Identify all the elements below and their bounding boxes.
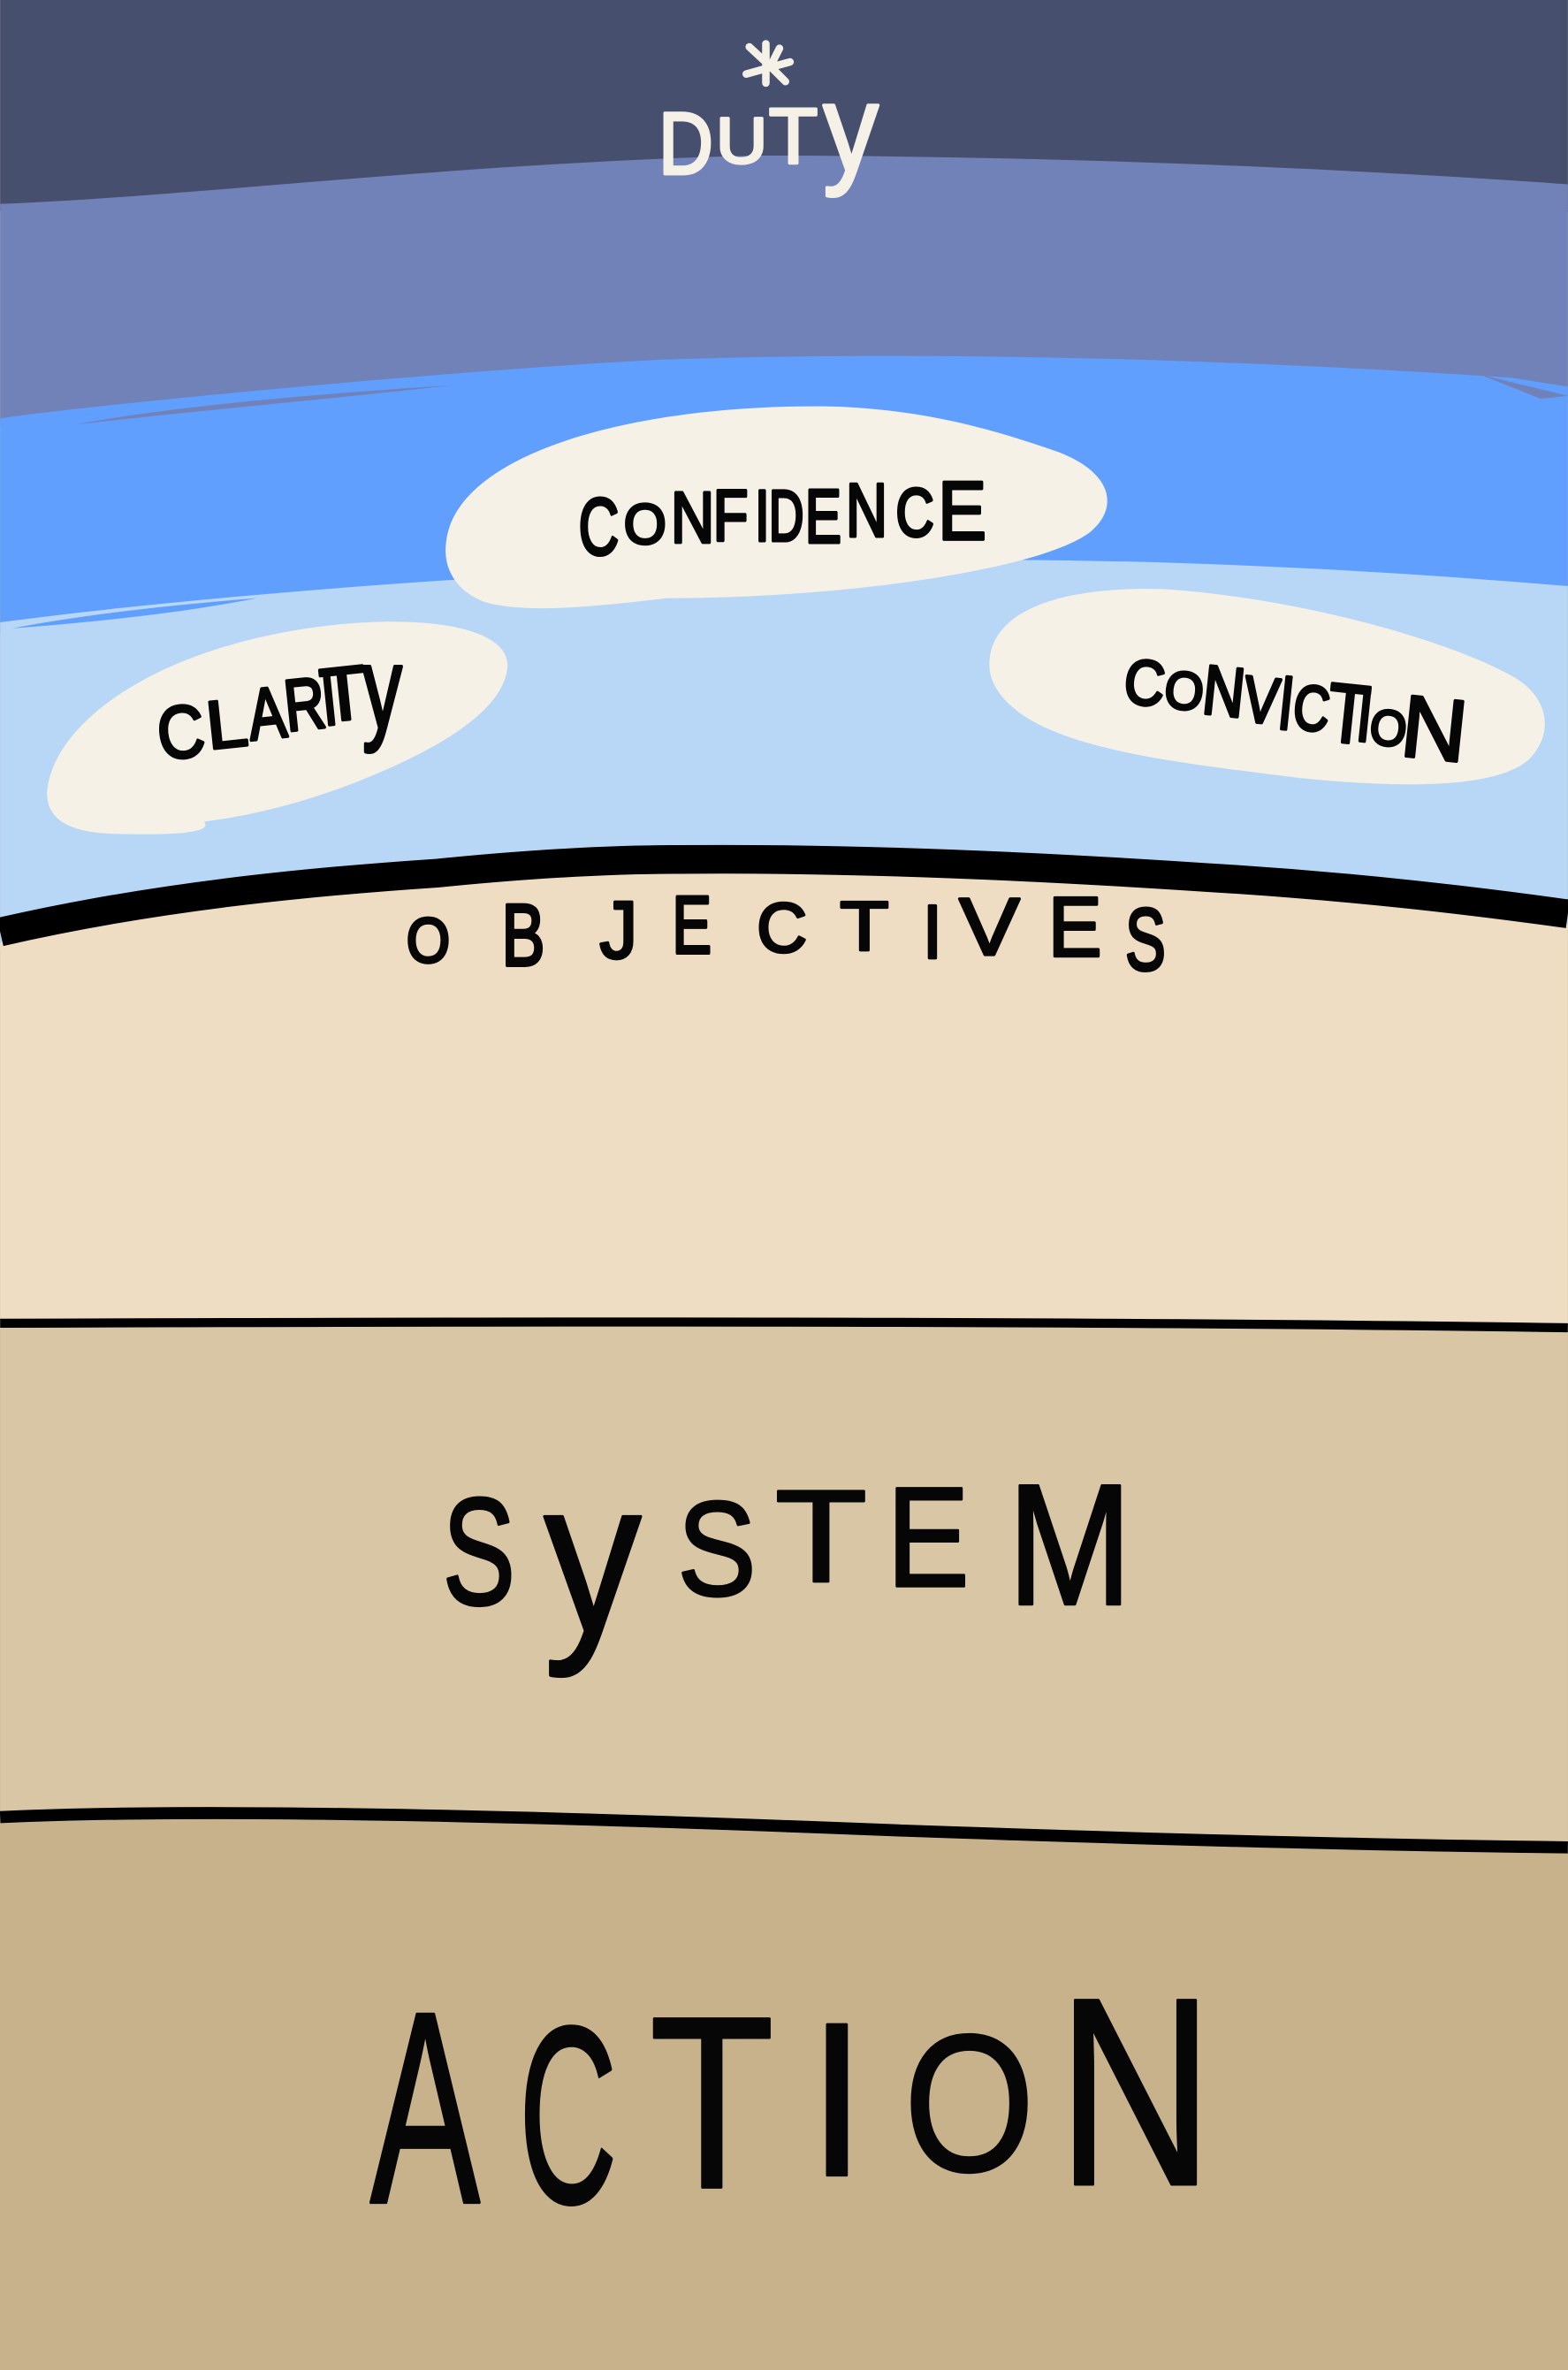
band: system ground [0,1322,1568,1850]
label: clarity: A [244,671,290,756]
label: confidence: I [755,476,770,557]
label: clarity: T [316,651,371,739]
label: conviction: I [1353,679,1376,757]
band: bright blue sky [0,356,1568,635]
label: confidence: E [805,475,841,559]
brush streaks: blue band edges [76,375,1568,424]
label: confidence: E [938,464,986,557]
label: objectives: B [501,887,544,984]
label: objectives: T [840,887,889,964]
band: action ground [0,1813,1568,2370]
label: objectives [407,880,1166,989]
label: objectives: E [1048,880,1101,974]
label: duty: T [769,93,818,180]
label: objectives: V [959,881,1020,972]
label: objectives: E [673,880,712,972]
label: clarity: R [280,662,329,747]
label: objectives: C [757,889,807,967]
label: system: T [775,1462,867,1610]
label: duty: D [658,95,713,193]
label: system: M [1008,1448,1132,1641]
band: dark navy top sky [0,0,1568,211]
label: system: y [544,1435,642,1678]
label: objectives: J [600,884,637,975]
label: action: A [370,1956,480,2261]
label: conviction: O [1367,697,1410,758]
band: objectives ground [0,867,1568,1330]
cloud: conviction [989,589,1545,784]
label: clarity: C [153,689,209,775]
divider: system and action [0,1813,1568,1848]
band: pale blue sky [0,560,1568,952]
label: system [443,1435,1132,1678]
label: action: T [650,1965,774,2239]
label: conviction: O [1161,659,1206,723]
label: conviction [1121,646,1472,781]
label: action: I [808,1978,865,2222]
label: action: N [1057,1943,1214,2242]
label: action: C [519,1975,617,2256]
label: confidence: D [769,476,803,556]
label: system: S [443,1466,515,1637]
divider: objectives and system [0,1322,1568,1328]
label: system: S [678,1475,756,1624]
label: duty: y [823,59,879,198]
label: confidence: F [713,475,748,556]
label: clarity [153,622,402,775]
label: conviction: V [1240,663,1283,739]
label: confidence: C [579,482,619,572]
label: confidence: N [671,477,714,558]
label: clarity: y [362,622,402,753]
label: objectives: S [1125,892,1166,989]
label: action: O [904,1994,1034,2213]
label: duty [658,59,879,198]
brush streak: pale band edge [12,598,257,629]
label: objectives: I [923,890,942,974]
label: duty: U [716,105,767,178]
label: action [370,1943,1214,2261]
label: conviction: T [1323,666,1374,763]
label: conviction: I [1275,659,1298,746]
label: clarity: L [202,684,251,765]
label: conviction: N [1199,652,1249,733]
cloud: clarity [47,621,507,834]
icon: star above duty [746,44,790,83]
label: conviction: C [1290,671,1333,745]
label: conviction: C [1121,646,1168,720]
horizon line: top of objectives [0,859,1568,932]
label: objectives: O [407,906,450,976]
label: confidence: O [624,493,666,556]
cloud: confidence [445,407,1107,608]
band: periwinkle sky [0,156,1568,426]
label: confidence: N [846,469,887,553]
label: clarity: I [317,655,341,742]
label: confidence: C [895,475,934,551]
label: system: E [887,1458,970,1616]
label: confidence [579,464,986,572]
label: conviction: N [1397,677,1472,781]
